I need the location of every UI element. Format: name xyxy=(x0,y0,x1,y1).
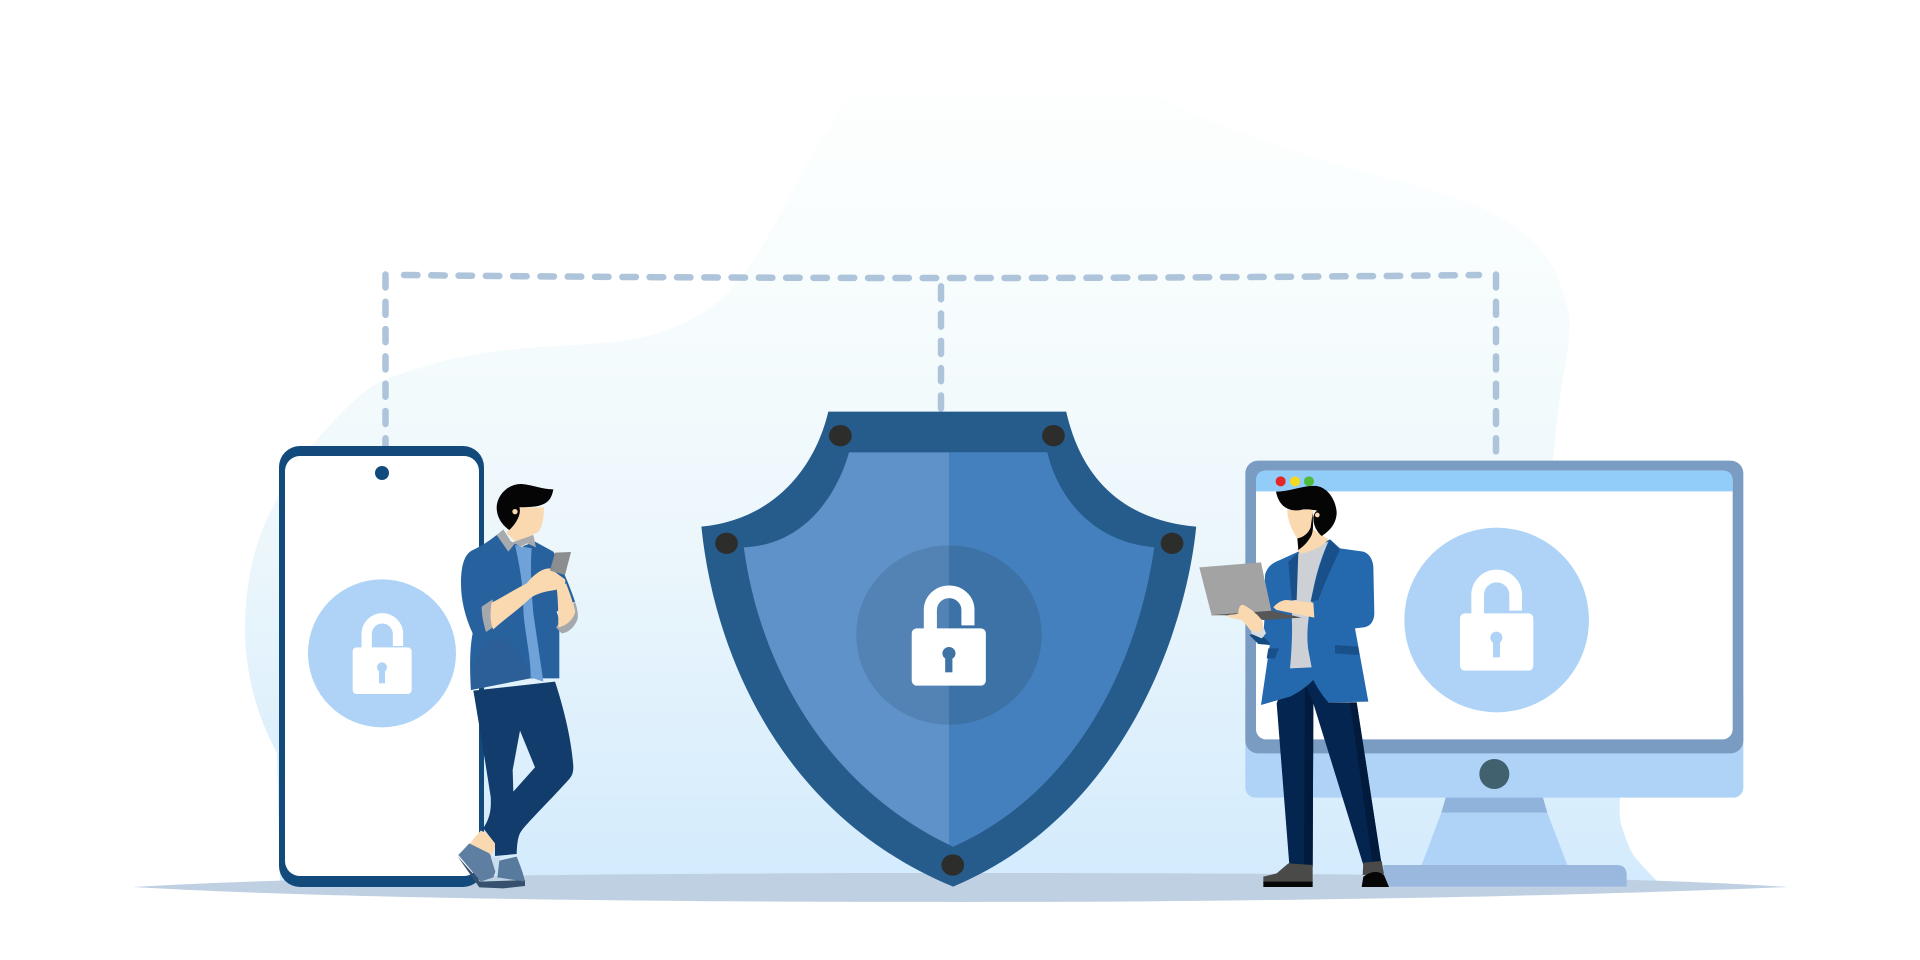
jacket shade xyxy=(471,637,530,690)
lock badge xyxy=(856,545,1042,725)
jacket xyxy=(1261,539,1374,705)
ankle xyxy=(470,831,497,857)
lapels xyxy=(1288,539,1340,602)
neck xyxy=(1297,528,1328,554)
phone screen xyxy=(285,456,479,876)
shield xyxy=(701,412,1196,887)
shoes xyxy=(1263,863,1313,883)
shield left face xyxy=(744,452,1154,847)
forearms and hands xyxy=(557,583,575,627)
handheld phone xyxy=(550,552,571,575)
rivets xyxy=(715,425,1183,876)
phone camera xyxy=(375,466,389,480)
window dots xyxy=(1276,476,1314,486)
monitor screen xyxy=(1256,471,1733,739)
holding hand xyxy=(1227,605,1263,633)
smartphone xyxy=(279,446,484,887)
ground shadow xyxy=(133,873,1788,902)
shoes xyxy=(457,856,525,888)
monitor chin xyxy=(1245,683,1743,798)
inner shirt xyxy=(515,545,543,682)
trousers xyxy=(473,682,573,856)
pockets xyxy=(1267,645,1359,658)
person with laptop xyxy=(1199,486,1389,887)
illustration canvas xyxy=(134,271,1787,902)
dashed connector lines xyxy=(386,274,1496,460)
monitor frame xyxy=(1245,461,1743,753)
hair xyxy=(497,484,553,530)
jacket xyxy=(461,535,575,690)
shield right face xyxy=(949,452,1154,846)
phone body xyxy=(279,446,484,887)
person with phone xyxy=(457,484,578,888)
trousers xyxy=(1277,667,1382,867)
collar xyxy=(497,529,536,552)
monitor stand neck xyxy=(1422,813,1567,865)
typing hand xyxy=(1273,600,1314,618)
background blob xyxy=(245,77,1658,882)
monitor lock badge xyxy=(1404,528,1589,712)
neck and face xyxy=(507,507,544,547)
shield rim xyxy=(701,412,1196,887)
monitor stand base xyxy=(1383,865,1627,887)
sleeve end xyxy=(1249,633,1270,645)
cuffs xyxy=(482,599,494,632)
hair xyxy=(1276,486,1337,536)
beard xyxy=(1297,513,1313,550)
desktop monitor xyxy=(1245,461,1743,887)
power button xyxy=(1479,759,1509,789)
shirt xyxy=(1290,542,1328,668)
ear xyxy=(512,509,518,514)
laptop xyxy=(1199,562,1302,620)
ear xyxy=(1315,513,1320,517)
phone lock badge xyxy=(308,579,456,727)
browser title bar xyxy=(1256,471,1733,491)
cuff xyxy=(1251,627,1266,638)
trouser shading xyxy=(1304,683,1382,867)
face xyxy=(1287,509,1313,538)
